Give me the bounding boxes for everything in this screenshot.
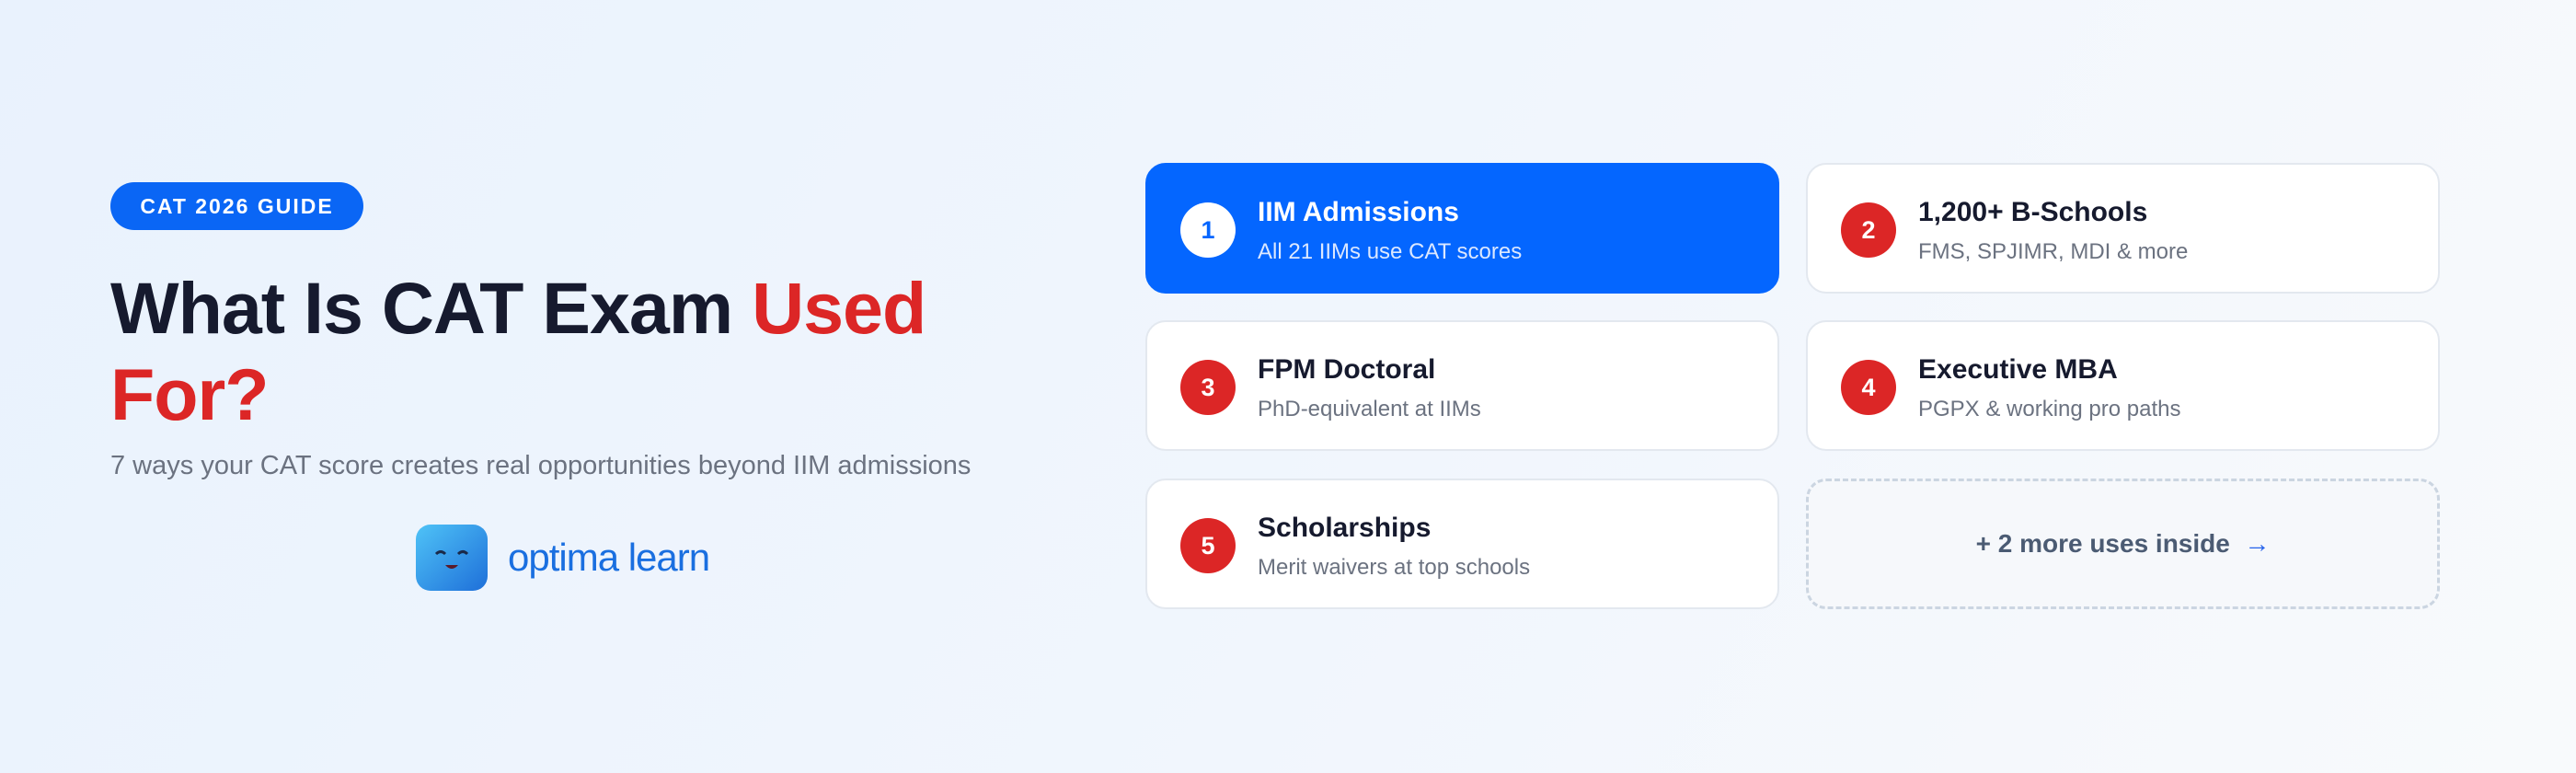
- card 1: [1145, 163, 1779, 294]
- badge: CAT 2026 GUIDE: [110, 182, 363, 230]
- icon: mascot: [416, 525, 488, 591]
- card 3: PhD-equivalent at IIMs: [1258, 397, 1481, 421]
- card 1: 1: [1201, 215, 1215, 243]
- card 5: 5: [1201, 532, 1215, 560]
- badge: CAT 2026 GUIDE: CAT 2026 GUIDE: [140, 193, 334, 217]
- logo text: optima learn: [508, 536, 709, 579]
- card 3: [1145, 320, 1779, 451]
- more uses card: →: [2244, 529, 2270, 558]
- card 4: Executive MBA: [1918, 354, 2118, 385]
- title: What Is CAT Exam Used For?: [110, 267, 926, 435]
- logo: optima learn: [416, 525, 709, 591]
- card 2: [1806, 163, 2440, 294]
- card 1: All 21 IIMs use CAT scores: [1258, 239, 1522, 264]
- card 3: 3: [1201, 374, 1215, 401]
- card 3: FPM Doctoral: [1258, 354, 1435, 385]
- subtitle: 7 ways your CAT score creates real opportunities beyond IIM admissions: [110, 451, 971, 480]
- card 4: 4: [1861, 374, 1876, 401]
- card 5: Scholarships: [1258, 513, 1431, 543]
- card 5: [1145, 479, 1779, 609]
- card 4: PGPX & working pro paths: [1918, 397, 2180, 421]
- card 5: Merit waivers at top schools: [1258, 555, 1530, 580]
- more uses card: + 2 more uses inside: [1976, 529, 2230, 558]
- card 2: 1,200+ B-Schools: [1918, 197, 2147, 227]
- card 4: [1806, 320, 2440, 451]
- card 2: FMS, SPJIMR, MDI & more: [1918, 239, 2188, 264]
- more uses card: [1806, 479, 2440, 609]
- card 2: 2: [1861, 215, 1876, 243]
- card 1: IIM Admissions: [1258, 197, 1459, 227]
